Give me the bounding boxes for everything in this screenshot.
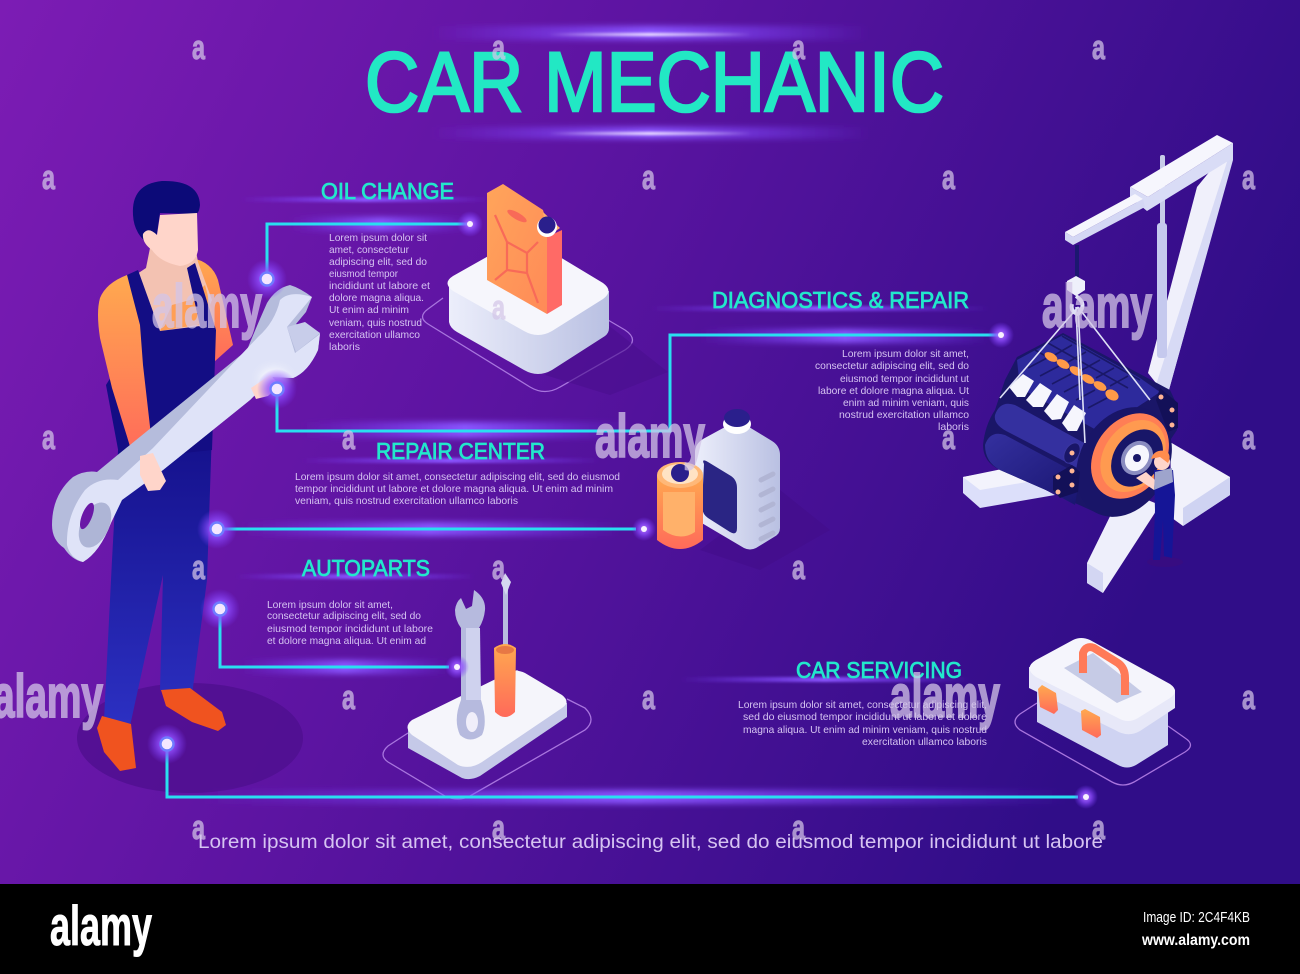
body text (815, 348, 969, 433)
watermarks: alamy (1042, 273, 1152, 340)
body text: labore et dolore magna aliqua. Ut (818, 385, 969, 397)
body text: exercitation ullamco (329, 329, 420, 341)
body text: tempor incididunt ut labore et dolore magna aliqua. Ut enim ad minim (295, 483, 613, 495)
body text: consectetur adipiscing elit, sed do (267, 610, 421, 622)
latches (1038, 685, 1058, 714)
image id: Image ID: 2C4F4KB (1143, 909, 1250, 926)
engine crane with hoisted engine (963, 135, 1233, 593)
watermarks: a (1092, 29, 1106, 67)
platform block (408, 670, 567, 779)
platform outline (1015, 703, 1190, 785)
body text: consectetur adipiscing elit, sed do (815, 360, 969, 372)
upper crankcase lobe (995, 404, 1088, 472)
embossed cross lines (495, 215, 538, 303)
connector: repair center dot line (197, 509, 656, 549)
oil can on platform (422, 184, 668, 395)
platform block (449, 283, 609, 374)
body text: dolore magna aliqua. (329, 292, 424, 304)
wrench ring hole (72, 497, 118, 553)
body text (329, 232, 430, 353)
engine block (983, 333, 1177, 513)
watermarks: a (1242, 419, 1256, 457)
title block (365, 26, 944, 139)
body text: Lorem ipsum dolor sit amet, (842, 348, 969, 360)
lifting ropes (1000, 307, 1150, 443)
watermarks: a (492, 289, 506, 327)
body text (267, 599, 433, 647)
watermarks: a (492, 29, 506, 67)
tools on platform (383, 573, 591, 799)
watermarks: a (192, 549, 206, 587)
front arm (98, 275, 153, 456)
watermarks: alamy (152, 273, 262, 340)
cylinder heads (1017, 335, 1160, 432)
piston (1160, 155, 1165, 225)
body text: eiusmod tempor incididunt ut labore (267, 623, 433, 635)
connector: car servicing (147, 724, 1098, 809)
body text: Lorem ipsum dolor sit amet, (267, 599, 393, 611)
jug shadow (700, 490, 830, 570)
section: oil change (240, 178, 490, 353)
small wrench (455, 590, 485, 740)
hair (133, 181, 200, 246)
mechanic figure (52, 181, 320, 793)
toolbox (1015, 638, 1190, 785)
handle (1083, 647, 1125, 695)
jerrycan (487, 184, 547, 314)
body text: nostrud exercitation ullamco (839, 409, 969, 421)
body text: incididunt ut labore et (329, 280, 430, 292)
giant wrench (52, 285, 320, 562)
platform outline (383, 699, 591, 799)
neck and chest (128, 245, 212, 335)
jug cap (723, 414, 751, 434)
body text (295, 471, 620, 507)
watermarks: a (1242, 679, 1256, 717)
jug (695, 424, 780, 550)
face (143, 213, 198, 266)
watermarks: a (642, 679, 656, 717)
oil bottles (657, 409, 830, 570)
footer logo: alamy (50, 894, 152, 957)
small worker (1136, 451, 1183, 567)
body text: Lorem ipsum dolor sit (329, 232, 427, 244)
body text: adipiscing elit, sed do (329, 256, 427, 268)
floor shadow (77, 683, 303, 793)
crane base right foot (1170, 442, 1230, 526)
body text: veniam, quis nostrud (329, 317, 422, 329)
watermarks: a (792, 29, 806, 67)
connector: diagnostics and repair center (257, 322, 1014, 438)
heading: AUTOPARTS (302, 555, 430, 581)
cap (537, 217, 557, 237)
jug ribs (761, 474, 773, 539)
back arm (192, 258, 233, 362)
heading: DIAGNOSTICS & REPAIR (712, 287, 969, 313)
watermarks: alamy (595, 403, 705, 470)
body text: laboris (938, 421, 969, 433)
boom (1065, 194, 1143, 237)
watermarks: a (42, 159, 56, 197)
connector: autoparts (200, 589, 469, 679)
watermarks: a (942, 419, 956, 457)
body text: enim ad minim veniam, quis (843, 397, 969, 409)
legs (104, 430, 212, 726)
heading: OIL CHANGE (321, 178, 454, 204)
connector: oil change (247, 211, 483, 299)
body text (738, 699, 987, 748)
watermarks: a (192, 29, 206, 67)
hook (1067, 276, 1085, 296)
hands (140, 453, 166, 491)
watermarks: a (492, 809, 506, 847)
platform shadow (545, 325, 668, 395)
crane base left foot (963, 469, 1055, 508)
body text: sed do eiusmod tempor incididunt ut labore et dolore (743, 711, 987, 723)
body text: Lorem ipsum dolor sit amet, consectetur adipiscing elit, (738, 699, 987, 711)
crane front leg (1087, 490, 1160, 593)
white intake blocks (1009, 374, 1086, 431)
section: diagnostics and repair (650, 287, 990, 433)
watermarks: alamy (890, 663, 1000, 730)
screwdriver (503, 582, 508, 650)
watermarks: a (942, 159, 956, 197)
body text: magna aliqua. Ut enim ad minim veniam, quis nostrud (743, 724, 987, 736)
body text: eiusmod tempor incididunt ut (840, 373, 969, 385)
watermarks: a (792, 809, 806, 847)
body text: exercitation ullamco laboris (862, 736, 987, 748)
site url: www.alamy.com (1141, 932, 1250, 949)
bottom caption: Lorem ipsum dolor sit amet, consectetur adipiscing elit, sed do eiusmod tempor incididunt ut labore (198, 832, 1103, 853)
section: autoparts (235, 555, 475, 647)
watermarks: a (1092, 809, 1106, 847)
overalls bib (106, 263, 216, 460)
body text: laboris (329, 341, 360, 353)
platform outline (422, 298, 632, 392)
footer bar (0, 884, 1300, 974)
watermarks: a (342, 679, 356, 717)
section: car servicing (680, 657, 987, 748)
watermarks: a (492, 549, 506, 587)
shoes (161, 688, 226, 731)
watermarks: a (1242, 159, 1256, 197)
watermarks: a (342, 419, 356, 457)
heading: CAR SERVICING (796, 657, 962, 683)
section: repair center (295, 438, 620, 507)
body text: veniam, quis nostrud exercitation ullamco laboris (295, 495, 518, 507)
orange valve covers (1043, 350, 1121, 403)
body text: Lorem ipsum dolor sit amet, consectetur adipiscing elit, sed do eiusmod (295, 471, 620, 483)
box body (1037, 690, 1168, 768)
body text: Ut enim ad minim (329, 304, 409, 316)
flywheel (1057, 390, 1191, 534)
small can (657, 475, 703, 549)
lid panel (1064, 653, 1142, 703)
title text: CAR MECHANIC (365, 35, 944, 129)
watermarks: a (42, 419, 56, 457)
crane upright (1148, 143, 1233, 397)
watermarks: a (792, 549, 806, 587)
body text: amet, consectetur (329, 244, 409, 256)
body text: eiusmod tempor (329, 268, 398, 280)
watermarks: a (642, 159, 656, 197)
engine bolt pads (1053, 388, 1178, 498)
watermarks: a (192, 809, 206, 847)
cable (1075, 245, 1079, 277)
lower crankcase lobe (985, 434, 1080, 505)
crane top beam (1130, 135, 1233, 197)
body text: et dolore magna aliqua. Ut enim ad (267, 635, 426, 647)
heading: REPAIR CENTER (376, 438, 545, 464)
